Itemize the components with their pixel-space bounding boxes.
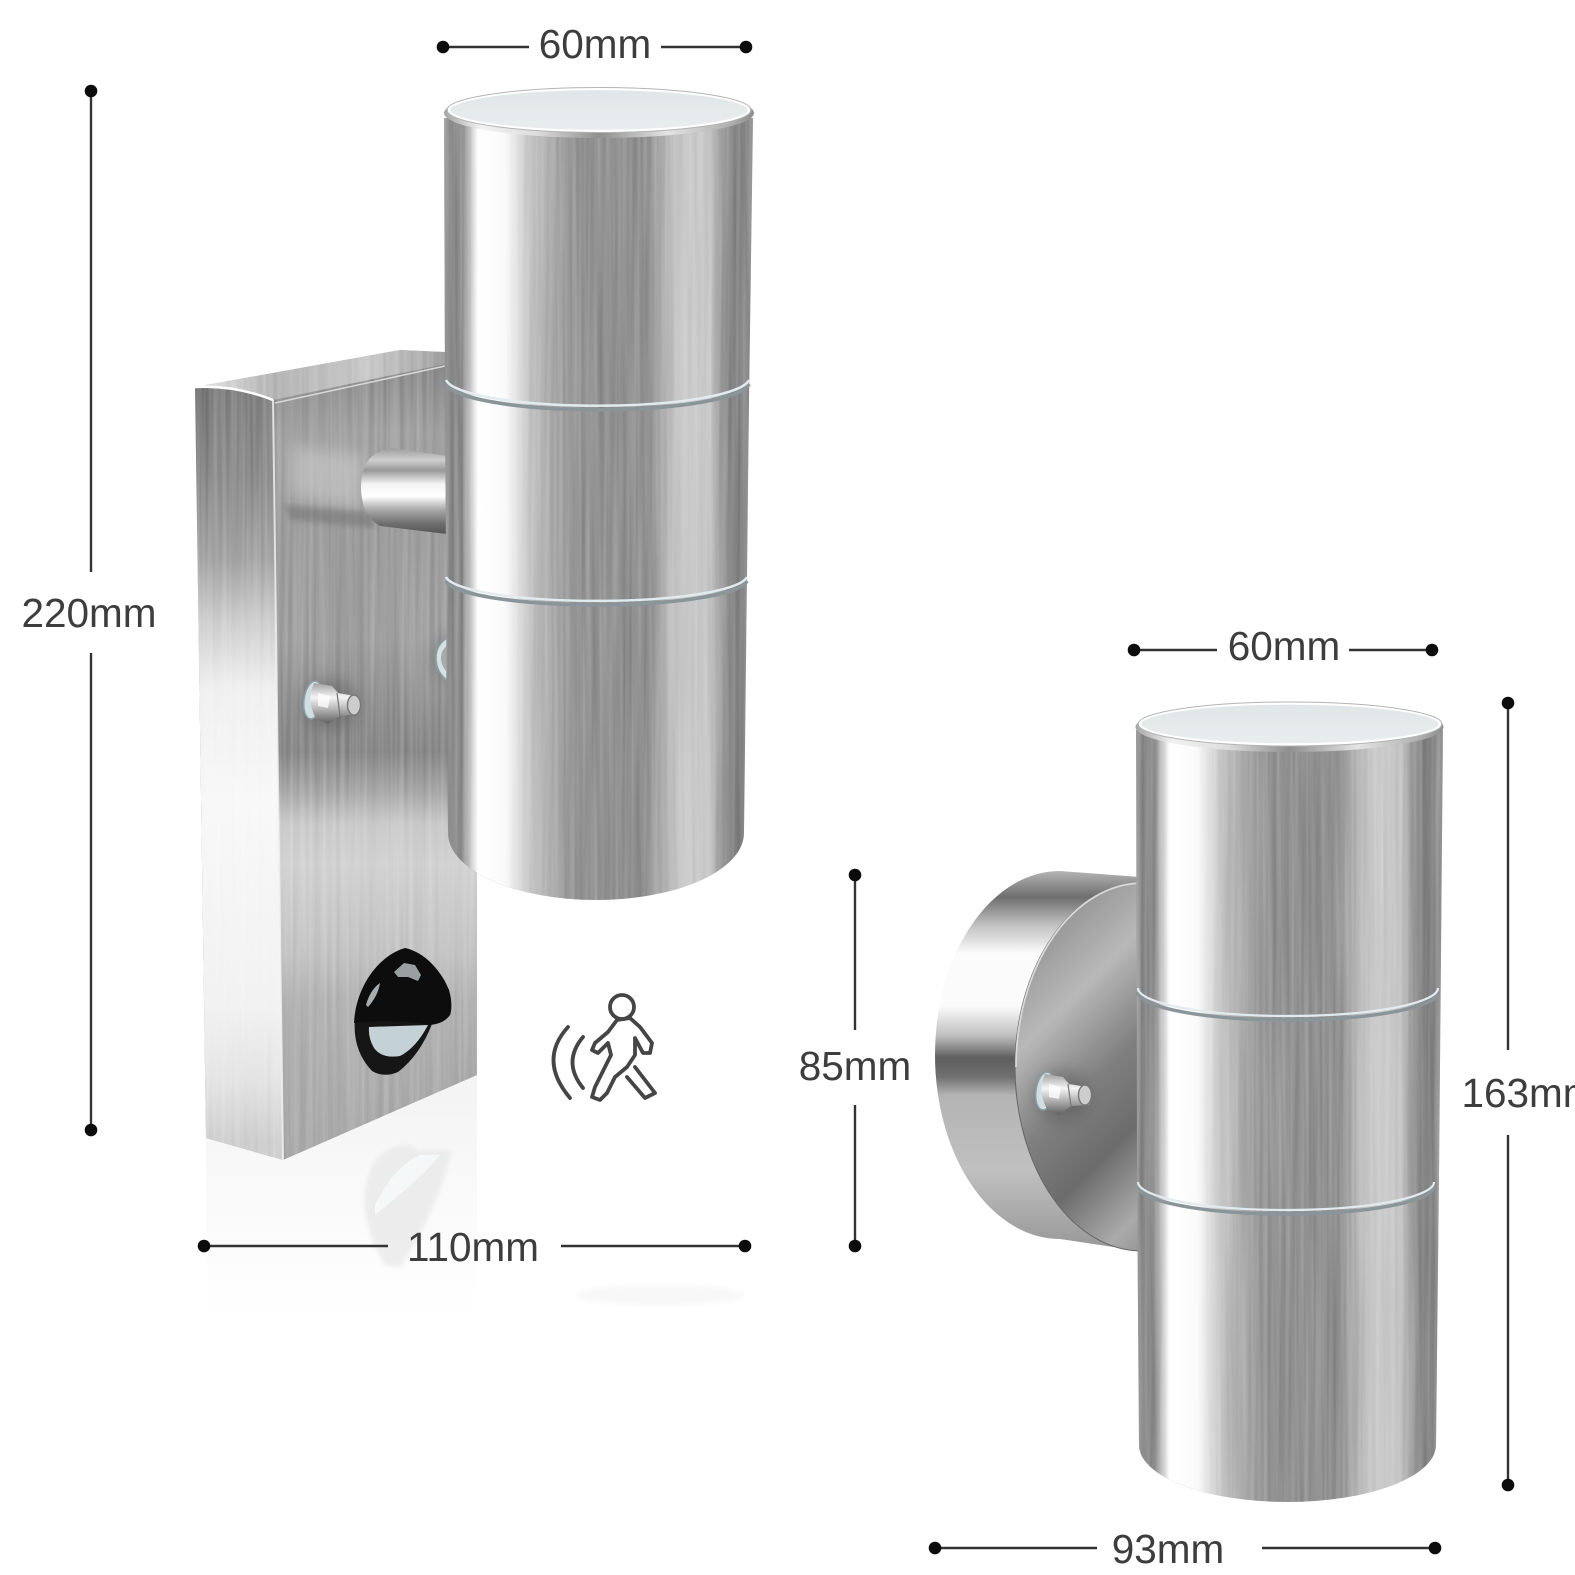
panel: sensor lamp backplate [195, 350, 477, 1160]
sensor lens [369, 1025, 428, 1057]
backplate side face [195, 387, 283, 1160]
panel: round lamp cylinder [1136, 702, 1444, 1502]
dimension: 220mm height [21, 85, 157, 1136]
cylinder rim [444, 88, 754, 138]
dimension: 93mm depth [929, 1526, 1441, 1572]
backplate front face [273, 364, 477, 1160]
glass top [449, 89, 749, 131]
sensor housing lower part [355, 1018, 432, 1075]
cylinder body [1136, 730, 1443, 1502]
plate front face [1014, 882, 1138, 1252]
sensor dome [354, 948, 451, 1025]
icon: screw on backplate [301, 679, 360, 731]
lower groove [446, 577, 747, 605]
backplate top face [195, 350, 445, 400]
dimension: 220mm height: 220mm [21, 590, 157, 636]
panel: sensor lamp reflection [206, 1075, 745, 1325]
cylinder rim [1136, 702, 1444, 752]
panel: sensor lamp cylinder [444, 88, 754, 900]
glass top [1140, 704, 1440, 744]
dimension: 85mm plate height: 85mm [799, 1043, 911, 1089]
upper groove [446, 380, 749, 410]
lower groove [1138, 1182, 1434, 1214]
icon: screw on round plate [1033, 1070, 1092, 1122]
dimension: 93mm depth: 93mm [1112, 1526, 1224, 1572]
dimension: 85mm plate height [799, 869, 911, 1252]
dimension: 60mm right: 60mm [1228, 623, 1340, 669]
dimension: 110mm width [198, 1224, 751, 1270]
dimension: 60mm right [1128, 623, 1438, 669]
sensor lamp mounting arm [361, 448, 447, 534]
plate outer edge [935, 871, 1140, 1251]
upper groove [1138, 988, 1438, 1020]
dimension: 60mm top left [437, 21, 752, 67]
icon: partly hidden screw [430, 634, 470, 682]
dimension: 60mm top left: 60mm [539, 21, 651, 67]
panel: motion sensor [354, 948, 451, 1075]
dimension: 163mm height [1461, 697, 1575, 1491]
dimension: 110mm width: 110mm [407, 1224, 539, 1270]
cylinder body [444, 118, 753, 900]
icon: motion detection walker [553, 995, 655, 1100]
panel: round lamp wall plate [935, 871, 1138, 1252]
